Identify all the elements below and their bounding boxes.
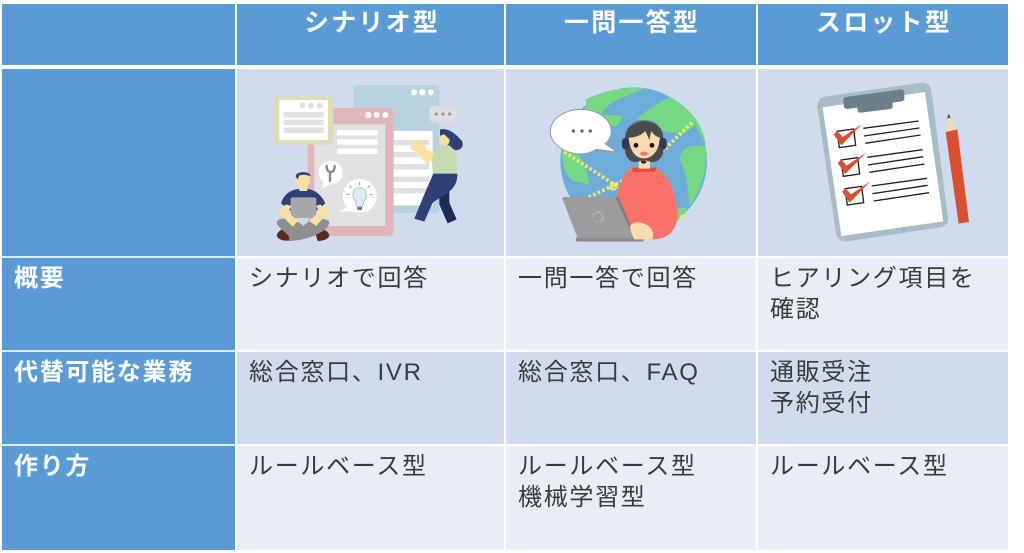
- text: ルールベース型: ルールベース型: [770, 453, 949, 480]
- text: ヒアリング項目を確認: [770, 265, 976, 323]
- text: 通販受注 予約受付: 通販受注: [770, 359, 873, 386]
- label divider 2: [2, 350, 235, 352]
- text: 総合窓口、IVR: 総合窓口、IVR: [249, 359, 423, 386]
- cell: 作り方 スロット: [758, 446, 1008, 550]
- cell: 代替 スロット: [758, 352, 1008, 444]
- text: ルールベース型: ルールベース型: [249, 453, 428, 480]
- label divider 3: [2, 444, 235, 446]
- icon: clipboard checklist and pencil: [817, 83, 969, 241]
- header cell: シナリオ型: [237, 4, 504, 65]
- cell: 作り方 シナリオ: [237, 446, 504, 550]
- cell: 概要 スロット: [758, 258, 1008, 350]
- header row background: [2, 4, 1008, 65]
- cell: 概要 一問一答: [506, 258, 756, 350]
- row label: 作り方: 作り方: [14, 453, 91, 480]
- text: ヒアリング項目を確認: 確認: [770, 296, 821, 323]
- text: ルールベース型 機械学習型: [518, 453, 697, 511]
- image cell: 一問一答型: [506, 69, 756, 256]
- icon: people and windows illustration: [273, 85, 463, 241]
- header cell: スロット型: [758, 4, 1008, 65]
- heading: スロット型: スロット型: [816, 9, 952, 37]
- text: シナリオで回答: シナリオで回答: [249, 265, 429, 292]
- heading: 一問一答型: 一問一答型: [564, 9, 700, 37]
- text: 通販受注 予約受付: [770, 359, 873, 417]
- cell: 作り方 一問一答: [506, 446, 756, 550]
- text: 一問一答で回答: 一問一答で回答: [518, 265, 698, 292]
- cell: 代替 シナリオ: [237, 352, 504, 444]
- cell: 代替 一問一答: [506, 352, 756, 444]
- label divider 1: [2, 256, 235, 258]
- image cell: シナリオ型: [237, 69, 504, 256]
- heading: シナリオ型: シナリオ型: [304, 9, 440, 37]
- image cell: スロット型: [758, 69, 1008, 256]
- cell: 概要 シナリオ: [237, 258, 504, 350]
- text: ルールベース型 機械学習型: 機械学習型: [518, 484, 646, 511]
- row label cell column: [2, 69, 235, 550]
- icon: operator and globe illustration: [550, 87, 707, 242]
- text: ルールベース型 機械学習型: ルールベース型: [518, 453, 697, 480]
- text: 総合窓口、FAQ: 総合窓口、FAQ: [518, 359, 700, 386]
- text: ヒアリング項目を確認: ヒアリング項目を: [770, 265, 976, 292]
- row label: 概要: 概要: [14, 265, 65, 292]
- row label: 代替可能な業務: 代替可能な業務: [14, 359, 194, 386]
- header cell: 一問一答型: [506, 4, 756, 65]
- header cell: empty: [2, 4, 235, 65]
- text: 通販受注 予約受付: 予約受付: [770, 390, 873, 417]
